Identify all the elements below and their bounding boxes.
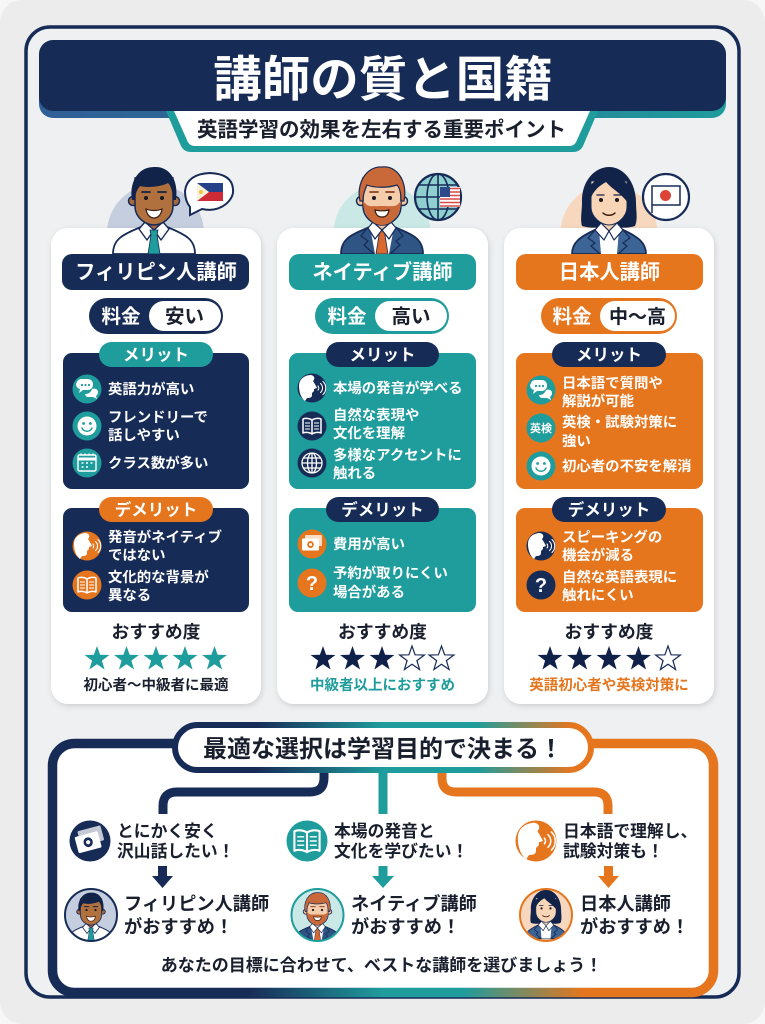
demerit panel: 触れにくい [562, 587, 634, 604]
heading pill: Japanese: 日本人講師 [559, 261, 660, 284]
subtitle text: 英語学習の効果を左右する重要ポイント [197, 118, 566, 142]
recommendation: Filipino [65, 889, 269, 941]
merit panel [289, 342, 476, 489]
heading pill: Filipino: フィリピン人講師 [75, 261, 237, 284]
demerit panel: デメリット [568, 500, 650, 520]
closing message: あなたの目標に合わせて、ベストな講師を選びましょう！ [161, 956, 602, 975]
recommendation: おすすめ度 [338, 622, 427, 642]
merit panel [516, 342, 703, 489]
merit panel: クラス数が多い [108, 454, 208, 472]
goal: cheap and lots of talking: 沢山話したい！ [117, 842, 234, 861]
recommendation [529, 622, 689, 694]
arrow: to Japanese [598, 866, 619, 888]
goal: cheap and lots of talking [70, 820, 234, 862]
icon: speech bubble with Philippine flag [185, 173, 233, 215]
merit panel: 多様なアクセントに [333, 446, 462, 464]
panel: Japanese teachers [504, 167, 714, 704]
panel: Filipino teachers [51, 167, 261, 704]
price pill: 中～高 [609, 306, 666, 328]
merit panel: 初心者の不安を解消 [562, 457, 692, 475]
recommendation: native: ネイティブ講師 [351, 893, 477, 914]
demerit panel: デメリット [115, 500, 197, 520]
heading pill: Japanese [516, 254, 703, 290]
merit panel: 文化を理解 [333, 424, 405, 442]
merit panel: 強い [562, 433, 591, 450]
goal: pronunciation and culture [286, 820, 468, 862]
arrow: to native [372, 866, 394, 888]
recommendation: Japanese: がおすすめ！ [580, 916, 689, 937]
heading pill: best choice: 最適な選択は学習目的で決まる！ [203, 736, 563, 763]
merit panel: 本場の発音が学べる [333, 379, 463, 397]
merit panel: 自然な表現や [333, 406, 419, 424]
price pill: 安い [165, 306, 204, 328]
price pill [89, 298, 223, 334]
goal: understand in Japanese [516, 820, 697, 862]
price pill: 料金 [552, 306, 592, 328]
merit panel: 話しやすい [108, 427, 180, 444]
connector: to Japanese path [442, 770, 608, 814]
merit panel: メリット [350, 346, 416, 364]
demerit panel: 発音がネイティブ [108, 528, 223, 546]
demerit panel: ? [306, 573, 318, 595]
demerit panel: 機会が減る [562, 546, 634, 564]
panel: native teachers [277, 167, 488, 704]
goal: understand in Japanese: 日本語で理解し、 [563, 822, 697, 841]
portrait: Japanese teacher [572, 167, 646, 254]
price pill: 料金 [101, 306, 141, 328]
merit panel: 日本語で質問や [562, 375, 663, 392]
subtitle ribbon [166, 111, 598, 152]
recommendation [310, 622, 455, 694]
heading pill: native [289, 254, 476, 290]
recommendation: おすすめ度 [565, 622, 654, 642]
demerit panel: 自然な英語表現に [562, 568, 677, 586]
price pill: 高い [391, 305, 431, 328]
portrait: Filipino teacher [113, 167, 195, 254]
merit panel: メリット [576, 346, 642, 364]
icon: Japanese flag [643, 174, 689, 220]
price pill [315, 298, 449, 334]
title banner [39, 40, 726, 118]
recommendation: 初心者～中級者に最適 [84, 676, 229, 694]
recommendation: native [292, 889, 477, 941]
panel: best choice [52, 725, 714, 992]
demerit panel: 予約が取りにくい [333, 564, 448, 582]
merit panel: 触れる [333, 465, 376, 482]
recommendation: 英語初心者や英検対策に [529, 676, 689, 694]
heading pill: native: ネイティブ講師 [312, 260, 453, 284]
recommendation: native: がおすすめ！ [351, 916, 460, 937]
demerit panel [289, 497, 476, 612]
merit panel: フレンドリーで [108, 410, 208, 426]
demerit panel [63, 497, 249, 612]
merit panel [63, 342, 249, 489]
arrow: to Filipino [152, 866, 173, 888]
demerit panel: スピーキングの [562, 528, 662, 546]
demerit panel: 費用が高い [333, 535, 405, 553]
portrait: native teacher [341, 167, 423, 254]
demerit panel: 文化的な背景が [108, 568, 209, 586]
merit panel: メリット [123, 346, 189, 364]
recommendation: 中級者以上におすすめ [310, 677, 455, 694]
heading pill: Filipino [62, 254, 249, 290]
title: 講師の質と国籍 [213, 53, 553, 107]
goal: pronunciation and culture: 文化を学びたい！ [334, 841, 468, 861]
demerit panel: デメリット [341, 500, 424, 520]
demerit panel: ? [535, 575, 547, 597]
price pill: 料金 [327, 306, 367, 328]
demerit panel: 場合がある [333, 583, 405, 601]
recommendation: Japanese: 日本人講師 [580, 893, 671, 914]
recommendation: Japanese [520, 889, 689, 941]
merit panel: 解説が可能 [562, 392, 635, 410]
merit panel: 英語力が高い [108, 380, 194, 398]
recommendation [84, 622, 229, 694]
goal: pronunciation and culture: 本場の発音と [334, 821, 435, 841]
demerit panel [516, 497, 703, 612]
merit panel: 英検・試験対策に [562, 413, 677, 431]
icon: globe with US flag [415, 174, 461, 220]
connector: to Filipino path [163, 770, 324, 814]
recommendation: Filipino: フィリピン人講師 [124, 893, 269, 914]
recommendation: Filipino: がおすすめ！ [124, 916, 233, 937]
goal: understand in Japanese: 試験対策も！ [563, 841, 664, 861]
connector: to native path [378, 770, 388, 814]
heading pill: best choice [175, 725, 591, 770]
demerit panel: ではない [108, 547, 166, 564]
merit panel: 英検 [530, 421, 552, 435]
portrait backdrops [107, 184, 658, 282]
demerit panel: 異なる [108, 587, 151, 604]
recommendation: おすすめ度 [112, 622, 201, 642]
goal: cheap and lots of talking: とにかく安く [117, 822, 218, 841]
price pill [541, 298, 677, 334]
